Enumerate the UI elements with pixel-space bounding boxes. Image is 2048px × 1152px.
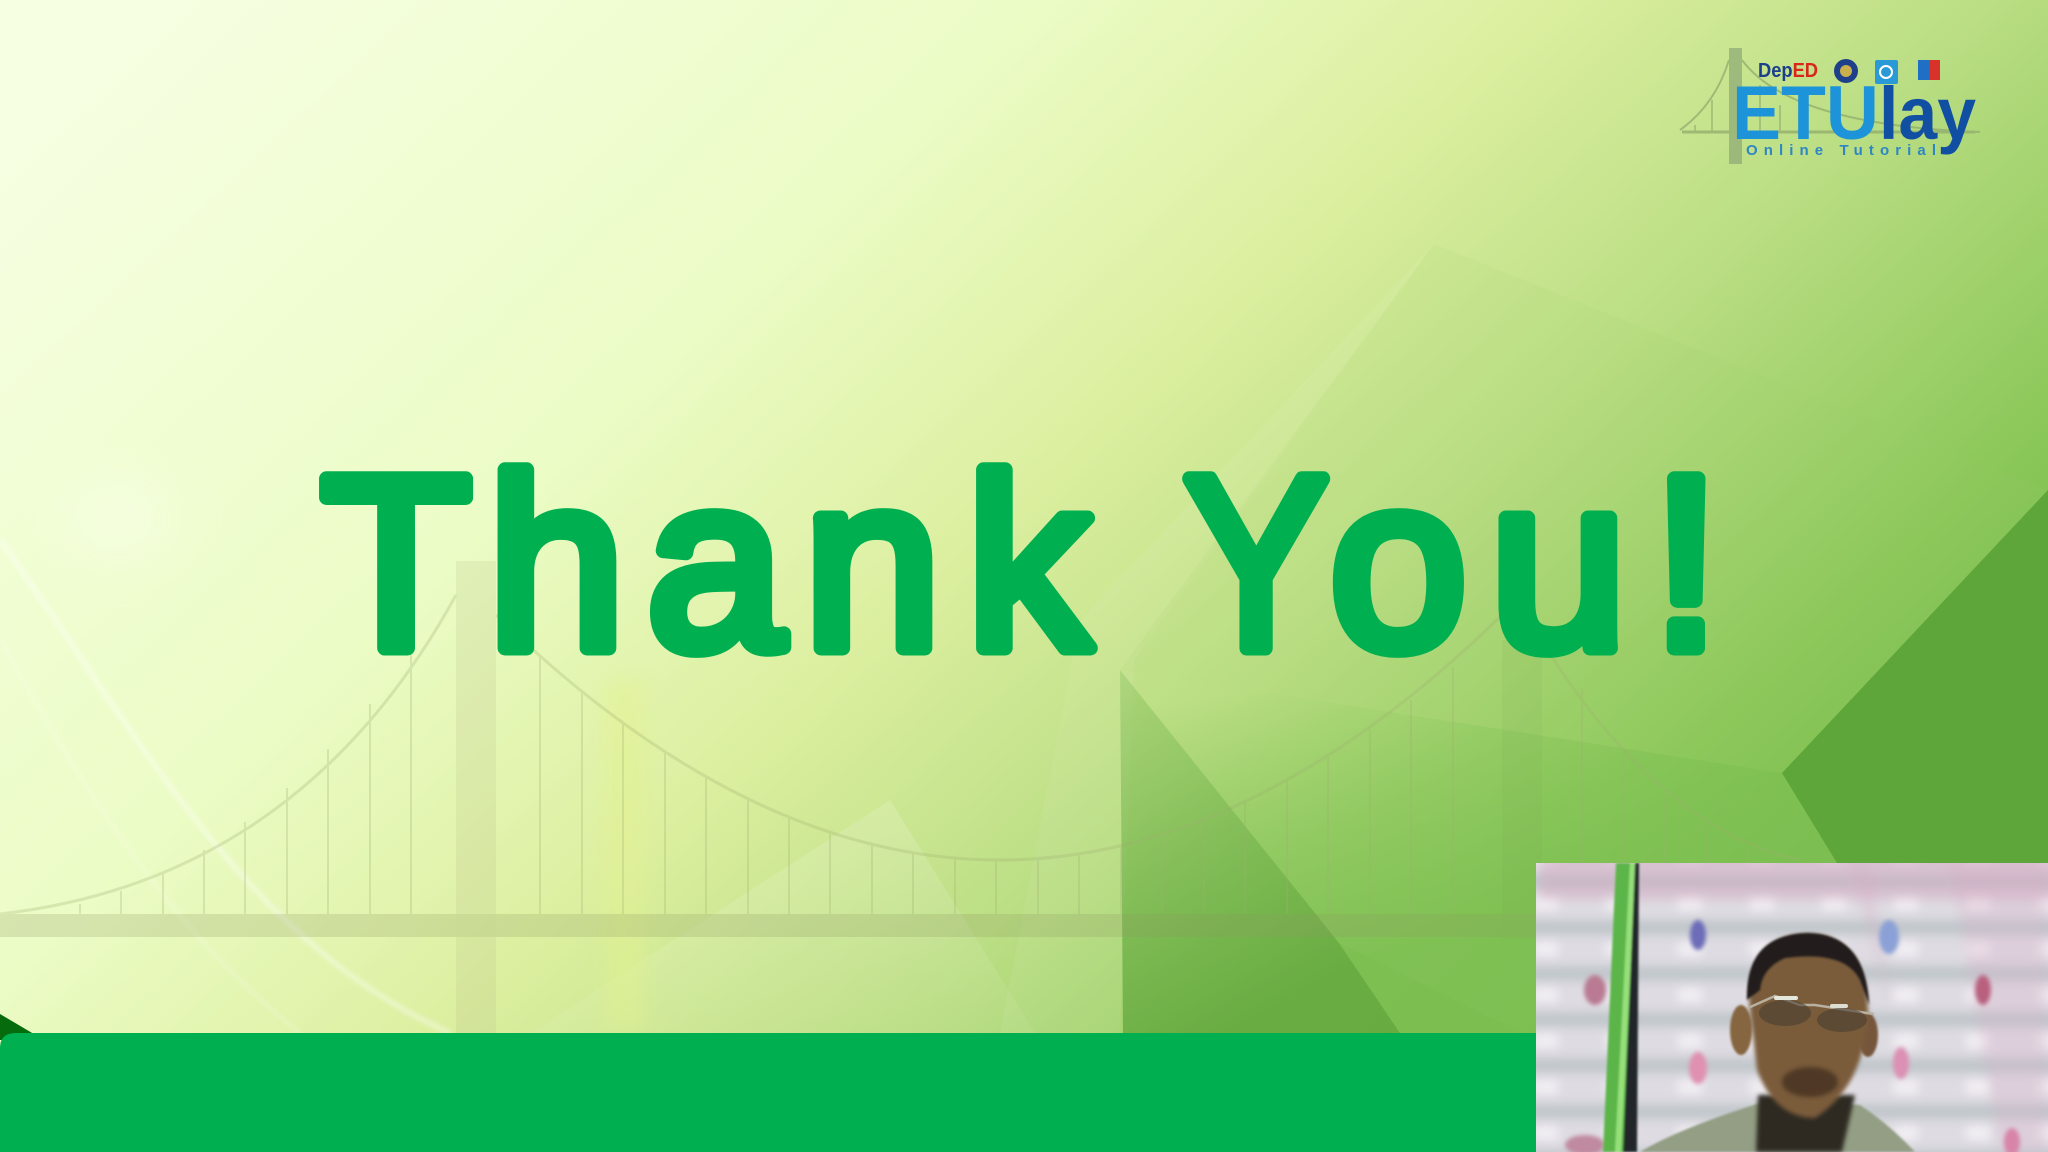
presenter ears: [1730, 1005, 1878, 1057]
logo: book emblem: [1918, 60, 1940, 80]
presenter shirt: [1640, 1103, 1915, 1152]
logo: tagline: Online Tutorial: [1746, 142, 1936, 159]
presenter hair: [1747, 933, 1869, 1005]
presenter face: [1749, 934, 1868, 1118]
curtain flowers: [1565, 920, 2020, 1152]
presenter neck shadow: [1756, 1095, 1855, 1152]
curtain: [1536, 863, 2048, 1152]
logo: blue square emblem: [1875, 60, 1898, 84]
corner arrow tip: [0, 1014, 44, 1040]
green curtain pole: [1603, 863, 1639, 1152]
logo: ETUlay Online Tutorial: [1680, 48, 1980, 164]
title: Thank You!: [321, 426, 1720, 701]
logo: round seal: [1834, 59, 1858, 83]
presenter mouth shadow: [1782, 1067, 1838, 1097]
logo: lay: lay: [1879, 72, 1976, 155]
logo: DepED wordmark: DepED: [1758, 60, 1818, 82]
presenter glasses: [1748, 996, 1874, 1032]
bottom green bar: [0, 1033, 1536, 1152]
title: Thank You!: Thank: [321, 426, 1091, 701]
title: Thank You!: ou!: [1330, 426, 1720, 701]
webcam panel: presenter: [1536, 863, 2048, 1152]
bridge watermark: [0, 561, 1800, 1033]
logo bridge mark: [1680, 48, 1980, 164]
logo: ETU: ETU: [1732, 71, 1879, 156]
title: Thank You!: Y: [1184, 426, 1328, 701]
